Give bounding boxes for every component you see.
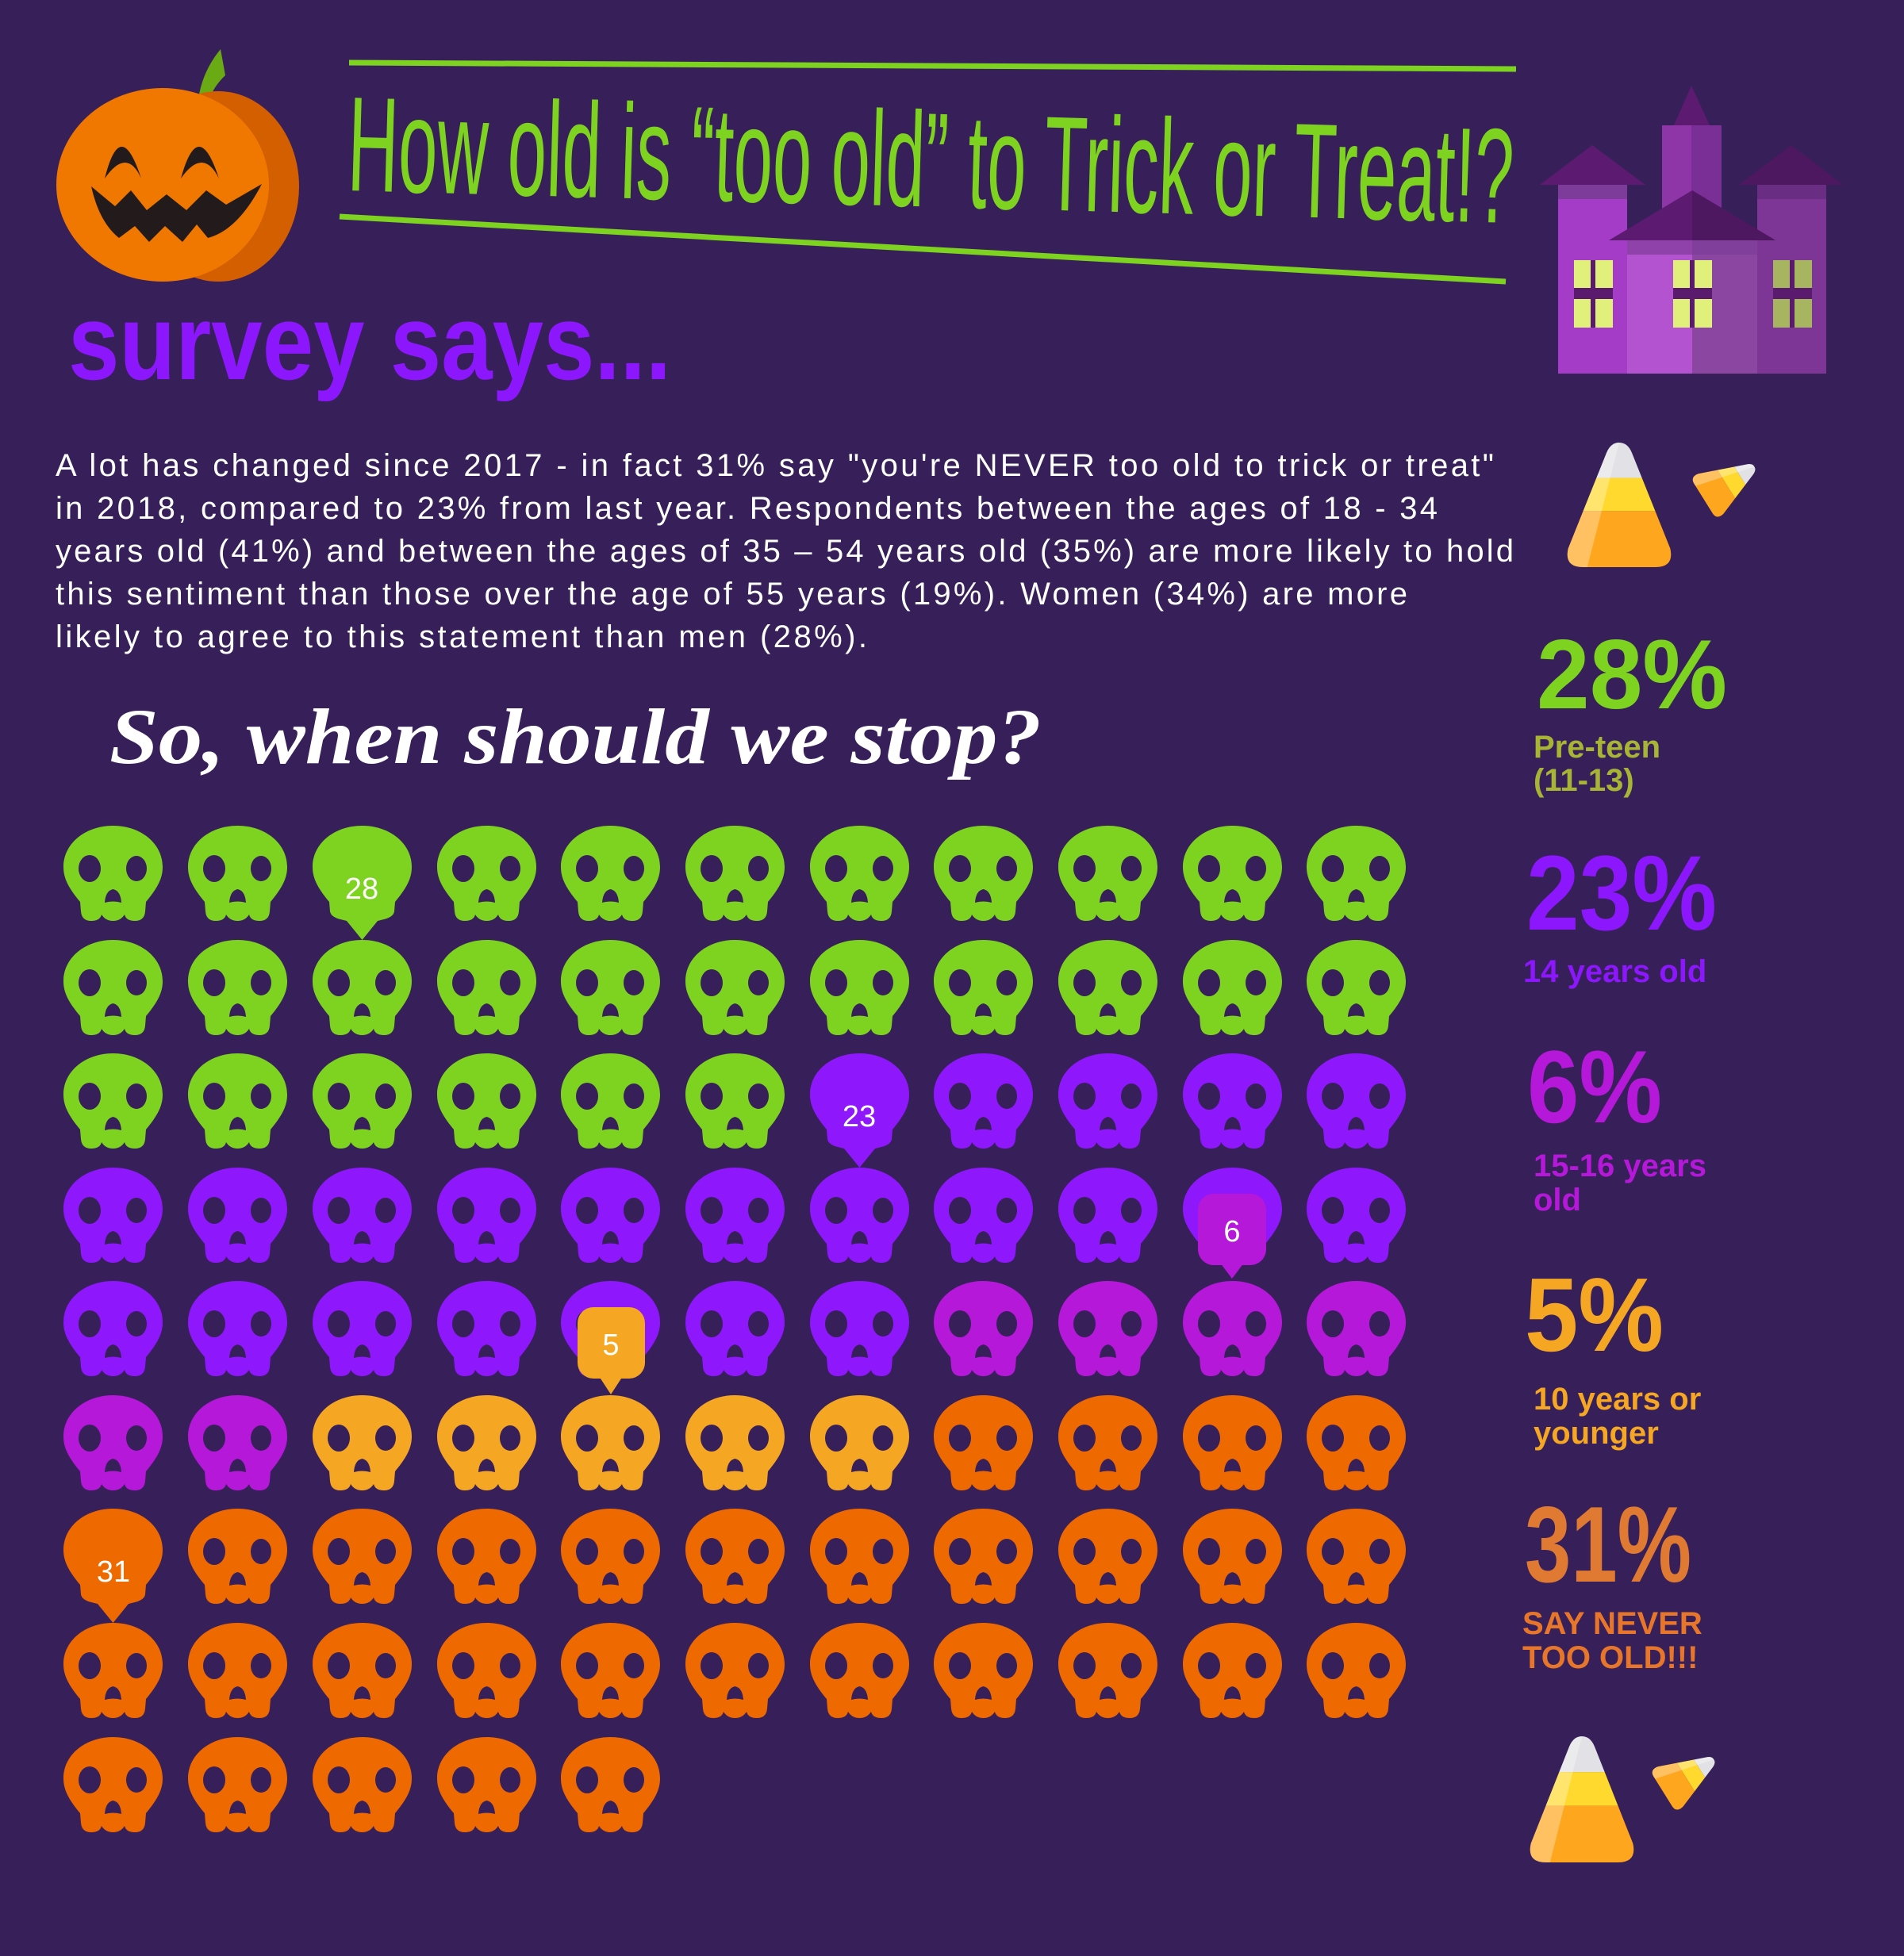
stat: 6% 15-16 years old [1527,1029,1706,1218]
icon: pumpkin [56,49,299,282]
skull row 5 [63,1281,1406,1376]
text block: intro paragraph: this sentiment than those over the age of 55 years (19%). Women (34%) are more [56,577,1407,612]
skull row 1: 28 [345,873,378,906]
callout: 5 [578,1307,645,1394]
skull row 6 [63,1395,1406,1490]
skull row 3 [63,1053,1406,1168]
stat: 23% 14 years old: 14 years old [1523,954,1706,989]
callout: 6: 6 [1223,1215,1241,1248]
skull row 1 [63,826,1406,940]
stat: 31% say never too old: 31% [1525,1484,1691,1605]
title lines [340,63,1516,282]
heading: survey says: survey says... [68,282,671,402]
icon: candy corn top [1566,443,1768,567]
stat: 31% say never too old: SAY NEVER [1522,1606,1702,1641]
stat: 28% pre-teen: (11-13) [1534,763,1634,798]
stat: 5% 10 years or younger [1525,1256,1701,1451]
stat: 28% pre-teen: 28% [1537,620,1727,730]
stat: 23% 14 years old: 23% [1526,834,1717,953]
stat: 5% 10 years or younger: 5% [1525,1256,1664,1373]
stat: 6% 15-16 years old: 15-16 years [1534,1149,1706,1183]
callout: 5: 5 [602,1329,620,1362]
stat: 6% 15-16 years old: old [1534,1183,1581,1218]
skull row 7: 31 [97,1555,130,1589]
skull row 3: 23 [843,1100,876,1133]
stat: 6% 15-16 years old: 6% [1527,1029,1662,1145]
stat: 31% say never too old: TOO OLD!!! [1522,1640,1698,1675]
skull row 4 [63,1168,1406,1263]
text block: intro paragraph: in 2018, compared to 23% from last year. Respondents between the ages of 18 - 34 [56,491,1438,526]
icon: haunted house [1540,86,1843,374]
stat: 5% 10 years or younger: younger [1534,1416,1659,1451]
skull row 9 [63,1737,660,1832]
icon: candy corn bottom [1529,1736,1727,1862]
text block: intro paragraph: A lot has changed since 2017 - in fact 31% say "you're NEVER too old to trick or treat" [56,448,1494,483]
stat: 28% pre-teen [1534,620,1727,798]
callout: 6 [1198,1194,1266,1279]
stat: 23% 14 years old [1523,834,1717,989]
skull grid chart [63,826,1406,1832]
text block: intro paragraph: likely to agree to this statement than men (28%). [56,619,867,654]
skull row 8 [63,1623,1406,1718]
skull row 2 [63,940,1406,1035]
heading: so when should we stop: So, when should we stop? [109,692,1042,780]
text block: intro paragraph: years old (41%) and between the ages of 35 – 54 years old (35%) are more likely to hold [56,534,1514,569]
text block: intro paragraph [56,448,1514,654]
skull row 7 [63,1509,1406,1623]
stat: 31% say never too old [1522,1484,1702,1675]
stat: 5% 10 years or younger: 10 years or [1534,1382,1701,1417]
stat: 28% pre-teen: Pre-teen [1534,730,1660,765]
